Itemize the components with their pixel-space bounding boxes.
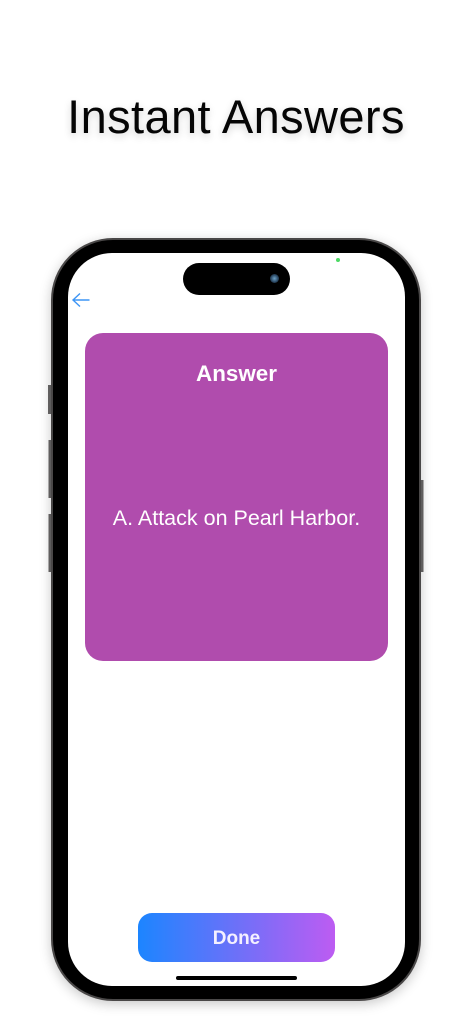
answer text: A. Attack on Pearl Harbor. <box>113 506 360 530</box>
screen <box>68 253 405 986</box>
home indicator <box>176 976 297 980</box>
icon: back arrow <box>72 293 90 307</box>
dynamic island <box>183 263 290 295</box>
card heading: Answer <box>196 361 277 386</box>
panel: answer card <box>85 333 388 661</box>
done button <box>138 913 335 962</box>
title: Instant Answers <box>67 90 405 143</box>
phone mockup <box>45 235 427 1010</box>
camera lens <box>270 274 279 283</box>
right side button <box>421 480 424 572</box>
status indicator dot <box>336 258 340 262</box>
phone frame <box>51 238 421 1001</box>
done button: Done <box>213 928 260 949</box>
left side buttons <box>48 385 51 572</box>
